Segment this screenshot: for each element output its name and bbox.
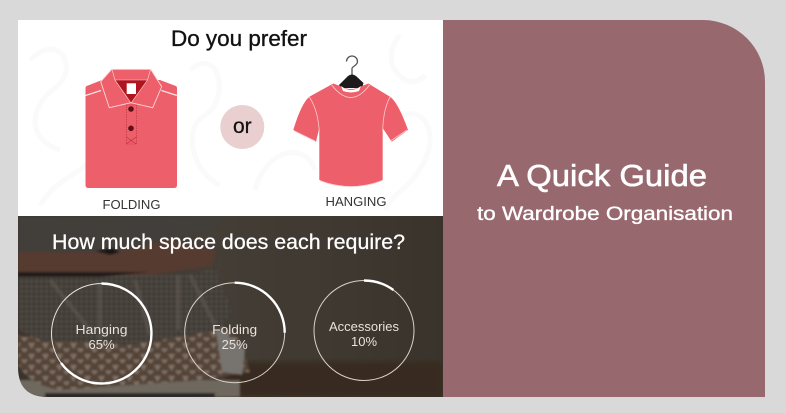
- icon: or badge: [220, 105, 264, 149]
- panel: space required with knitwear photo: [18, 216, 443, 397]
- heading: how much space: How much space does each require?: [52, 231, 405, 254]
- icon: or badge: or: [233, 115, 252, 138]
- icon: folded polo shirt: [86, 69, 177, 188]
- photo: stacked knitwear: [18, 216, 443, 397]
- panel: guide title: [443, 20, 765, 397]
- label: hanging: HANGING: [326, 194, 386, 209]
- subtitle: to wardrobe organisation: to Wardrobe Organisation: [477, 203, 733, 225]
- panel: choice between folding and hanging: [18, 20, 443, 216]
- title: a quick guide: A Quick Guide: [497, 158, 707, 193]
- chart: folding 25%: 25%: [222, 337, 248, 352]
- title: do you prefer: Do you prefer: [171, 26, 307, 51]
- chart: accessories 10%: [314, 280, 414, 380]
- chart: hanging 65%: 65%: [88, 337, 115, 352]
- chart: hanging 65%: Hanging: [76, 322, 128, 337]
- chart: accessories 10%: Accessories: [329, 319, 399, 334]
- label: folding: FOLDING: [102, 197, 160, 212]
- chart: accessories 10%: 10%: [351, 334, 377, 349]
- chart: hanging 65%: [52, 284, 152, 384]
- chart: folding 25%: [185, 283, 285, 383]
- icon: t-shirt on hanger: [293, 56, 408, 187]
- chart: folding 25%: Folding: [212, 322, 257, 337]
